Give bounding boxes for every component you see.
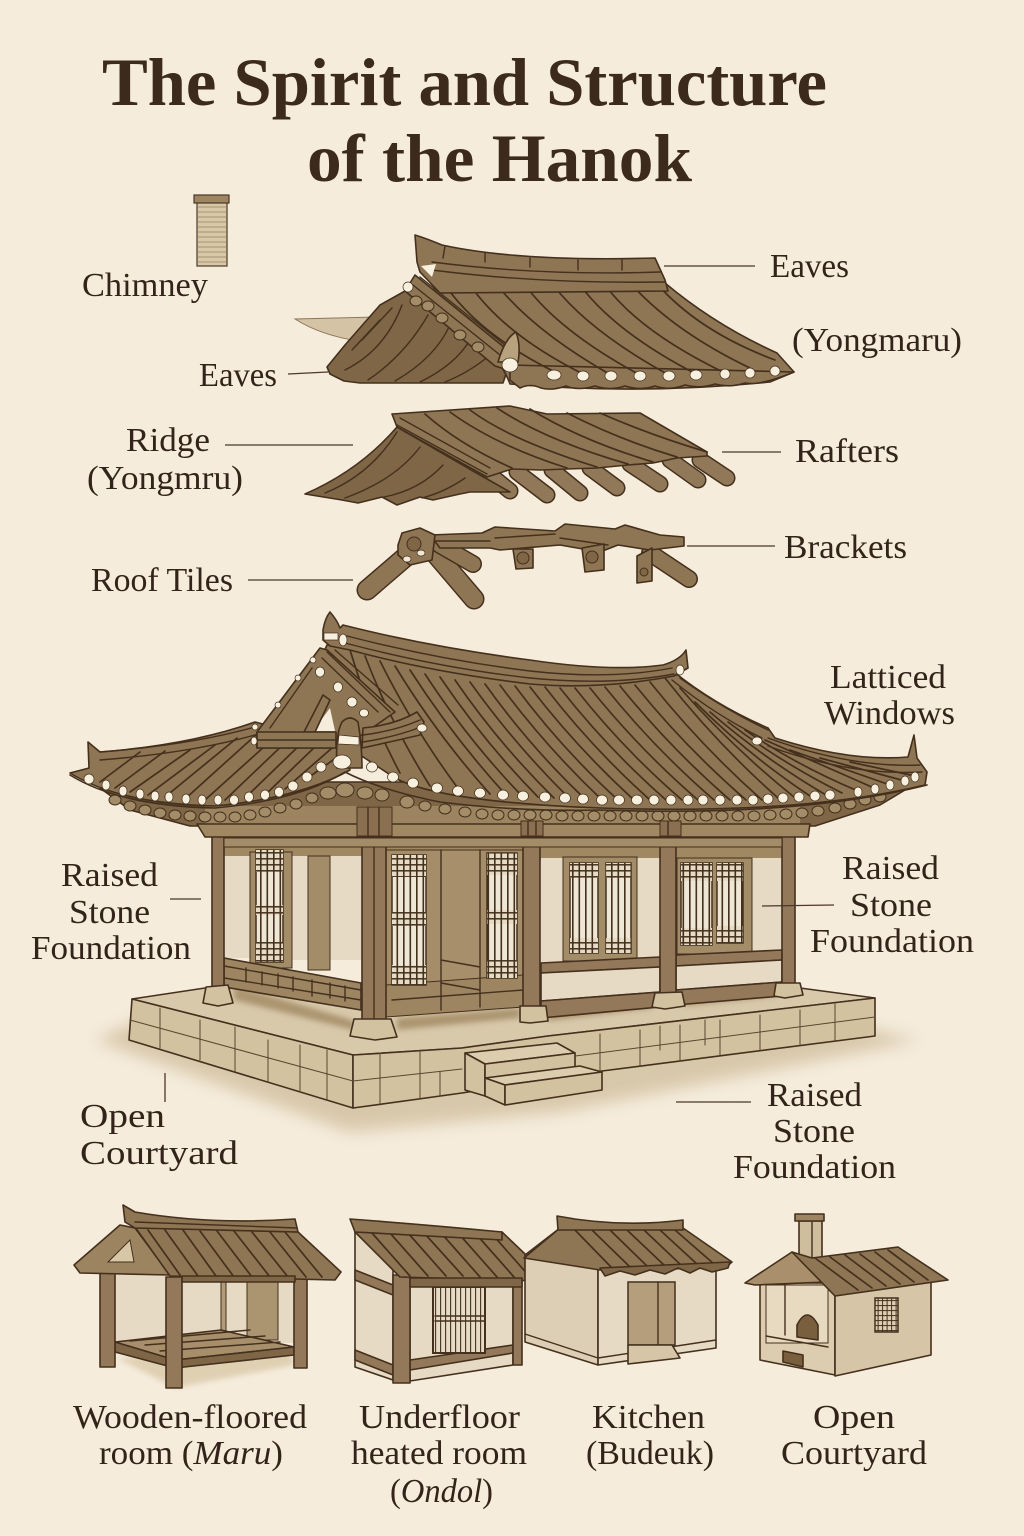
beams and rafter band	[100, 782, 905, 847]
label: rafters: Rafters	[795, 433, 899, 470]
small building: ondol	[350, 1219, 545, 1383]
label: open courtyard bottom: Courtyard	[781, 1435, 927, 1472]
label: kitchen	[586, 1399, 714, 1472]
label: raised stone foundation left	[31, 857, 201, 967]
label: open courtyard	[80, 1073, 238, 1172]
roof: cross gable	[251, 648, 762, 769]
label: raised stone foundation left: Raised	[61, 857, 158, 894]
label: maru	[73, 1399, 307, 1472]
lattice windows	[256, 850, 743, 985]
label: latticed windows: Windows	[824, 695, 955, 732]
label: ondol: heated room	[351, 1435, 527, 1472]
label: raised stone foundation right	[762, 850, 974, 960]
label: open courtyard: Courtyard	[80, 1135, 238, 1172]
label: eaves right: Eaves	[770, 248, 849, 285]
label: raised stone foundation bottom: Raised	[767, 1077, 862, 1114]
wooden posts and plinth blocks	[203, 836, 803, 1040]
label: raised stone foundation bottom: Stone	[773, 1113, 855, 1150]
icon: chimney	[194, 195, 229, 266]
title	[102, 44, 827, 196]
label: ridge Yongmru	[87, 422, 353, 497]
label: raised stone foundation bottom	[676, 1077, 896, 1186]
roof: ridge	[323, 612, 688, 686]
label: ondol: Underfloor	[359, 1399, 521, 1436]
label: raised stone foundation left: Foundation	[31, 930, 191, 967]
label: eaves left: Eaves	[199, 357, 277, 394]
exploded roof tile layer	[295, 235, 794, 389]
label: open courtyard: Open	[80, 1098, 165, 1135]
label: brackets: Brackets	[784, 529, 907, 566]
label: raised stone foundation right: Foundation	[810, 923, 974, 960]
small building: maru	[74, 1205, 341, 1388]
label: maru: room (Maru)	[99, 1435, 283, 1472]
label: eaves left	[199, 357, 328, 394]
label: latticed windows: Latticed	[830, 659, 946, 696]
stone steps	[465, 1043, 602, 1105]
ground shadow	[95, 1020, 920, 1132]
roof: left wing	[70, 722, 350, 806]
small building: kitchen	[524, 1216, 732, 1365]
label: raised stone foundation bottom: Foundation	[733, 1149, 896, 1186]
label: ridge Yongmru: (Yongmru)	[87, 460, 243, 497]
label: Yongmaru: (Yongmaru)	[792, 322, 962, 359]
roof: eave end tiles	[84, 762, 919, 805]
exploded rafter layer	[305, 406, 727, 505]
label: latticed windows	[824, 659, 955, 732]
main hanok illustration	[70, 612, 927, 1132]
label: raised stone foundation right: Raised	[842, 850, 939, 887]
label: ondol	[351, 1399, 527, 1510]
label: kitchen: Kitchen	[592, 1399, 705, 1436]
label: maru: Wooden-floored	[73, 1399, 307, 1436]
label: raised stone foundation right: Stone	[850, 887, 932, 924]
label: open courtyard bottom	[781, 1399, 927, 1472]
label: ridge Yongmru: Ridge	[126, 422, 210, 459]
label: chimney: Chimney	[82, 267, 208, 304]
stone plinth	[129, 985, 875, 1108]
roof: main slope	[70, 645, 927, 811]
label: kitchen: (Budeuk)	[586, 1435, 714, 1472]
label: raised stone foundation left: Stone	[69, 894, 150, 931]
title: The Spirit and Structure	[102, 44, 827, 120]
label: roof tiles: Roof Tiles	[91, 562, 233, 599]
small building: open courtyard hut	[745, 1214, 948, 1376]
label: ondol: (Ondol)	[390, 1473, 493, 1510]
title: of the Hanok	[307, 120, 692, 196]
walls and interior	[224, 840, 784, 1018]
exploded bracket layer	[367, 524, 689, 599]
label: open courtyard bottom: Open	[813, 1399, 895, 1436]
